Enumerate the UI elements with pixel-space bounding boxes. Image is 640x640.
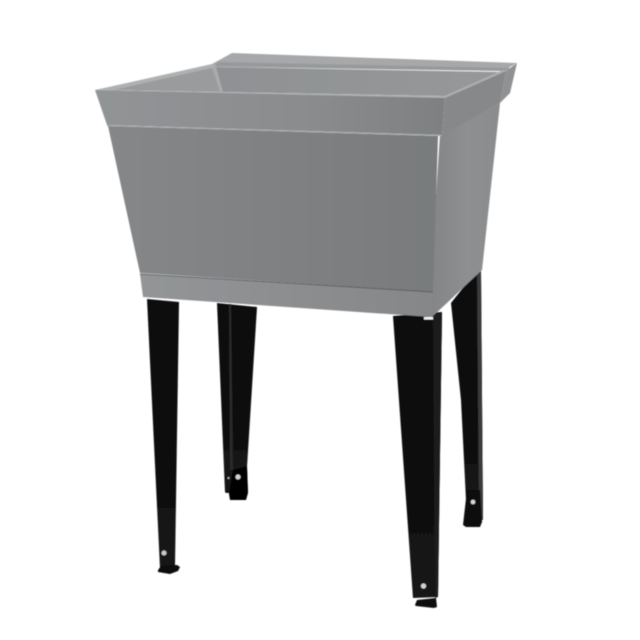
rim top edge <box>95 64 507 99</box>
rim right band <box>442 71 506 135</box>
front right leg <box>393 312 442 608</box>
back left leg <box>217 303 257 500</box>
rim lower edge <box>107 126 442 136</box>
rim front band <box>95 90 445 135</box>
right drain tab <box>500 63 517 103</box>
tub interior left wall <box>113 67 222 92</box>
front left leg <box>147 299 180 574</box>
tub lower band <box>140 274 433 317</box>
rear deck <box>212 53 517 71</box>
tub right side wall <box>428 103 500 317</box>
tub front panel <box>108 126 438 292</box>
tub interior back wall <box>215 67 500 96</box>
back right leg <box>451 270 483 527</box>
